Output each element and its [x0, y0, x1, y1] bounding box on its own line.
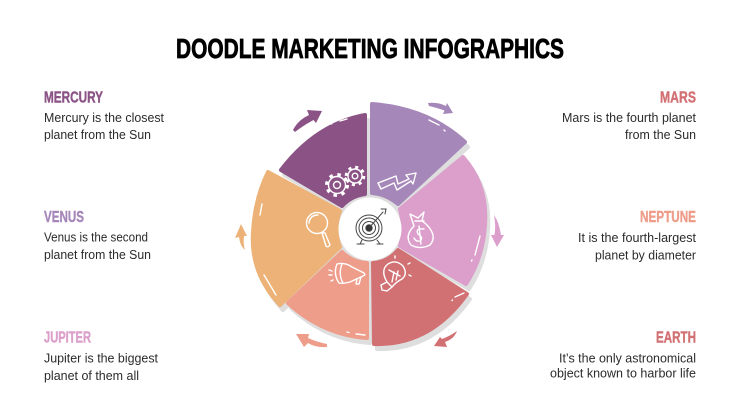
center circle [338, 198, 402, 260]
text block: Mars: MARS [660, 90, 696, 106]
text block: Venus: planet from the Sun [44, 247, 151, 262]
arrow: right [491, 215, 504, 247]
icon: magnifier [306, 212, 330, 247]
arrow: left [235, 224, 247, 250]
text block: Earth: EARTH [656, 330, 696, 346]
text block: Earth [550, 330, 696, 380]
segment: pink with money bag [400, 157, 485, 284]
text block: Earth: object known to harbor life [550, 366, 696, 380]
text block: Mars [562, 90, 696, 142]
text block: Neptune: It is the fourth-largest [578, 230, 696, 245]
arrow: top right [428, 103, 453, 114]
segment: orange with magnifier [253, 172, 340, 305]
segment: dark purple with gears [281, 115, 365, 206]
segment: light purple with growth arrow [372, 104, 465, 204]
text block: Venus [44, 209, 151, 262]
text block: Neptune: NEPTUNE [640, 209, 696, 226]
arrow: bottom right [434, 331, 457, 347]
arrow: bottom [296, 334, 327, 347]
icon: bullseye target [356, 209, 386, 244]
text block: Mercury: planet from the Sun [44, 127, 151, 142]
text block: Jupiter: planet of them all [44, 368, 139, 383]
segment: salmon with megaphone [288, 252, 367, 338]
text block: Mercury: MERCURY [44, 90, 103, 106]
segment: red with light bulb [373, 250, 467, 344]
text block: Mars: from the Sun [625, 127, 696, 142]
icon: light bulb [381, 256, 411, 291]
text block: Jupiter [44, 330, 158, 383]
icon: megaphone [329, 263, 365, 284]
text block: Neptune [578, 209, 697, 262]
arrow: top left [293, 110, 322, 132]
text block: Mercury: Mercury is the closest [44, 110, 164, 125]
wheel shadow [256, 109, 488, 349]
icon: gears [326, 167, 364, 196]
text block: Jupiter: JUPITER [44, 330, 91, 346]
icon: money bag [408, 212, 433, 248]
text block: Jupiter: Jupiter is the biggest [44, 350, 158, 366]
text block: Neptune: planet by diameter [595, 248, 697, 262]
text block: Earth: It’s the only astronomical [559, 350, 696, 366]
icon: zigzag arrow [378, 173, 416, 190]
title: DOODLE MARKETING INFOGRAPHICS [176, 33, 564, 64]
text block: Mars: Mars is the fourth planet [562, 110, 696, 125]
text block: Mercury [44, 90, 164, 142]
text block: Venus: VENUS [44, 209, 84, 226]
text block: Venus: Venus is the second [44, 230, 148, 244]
